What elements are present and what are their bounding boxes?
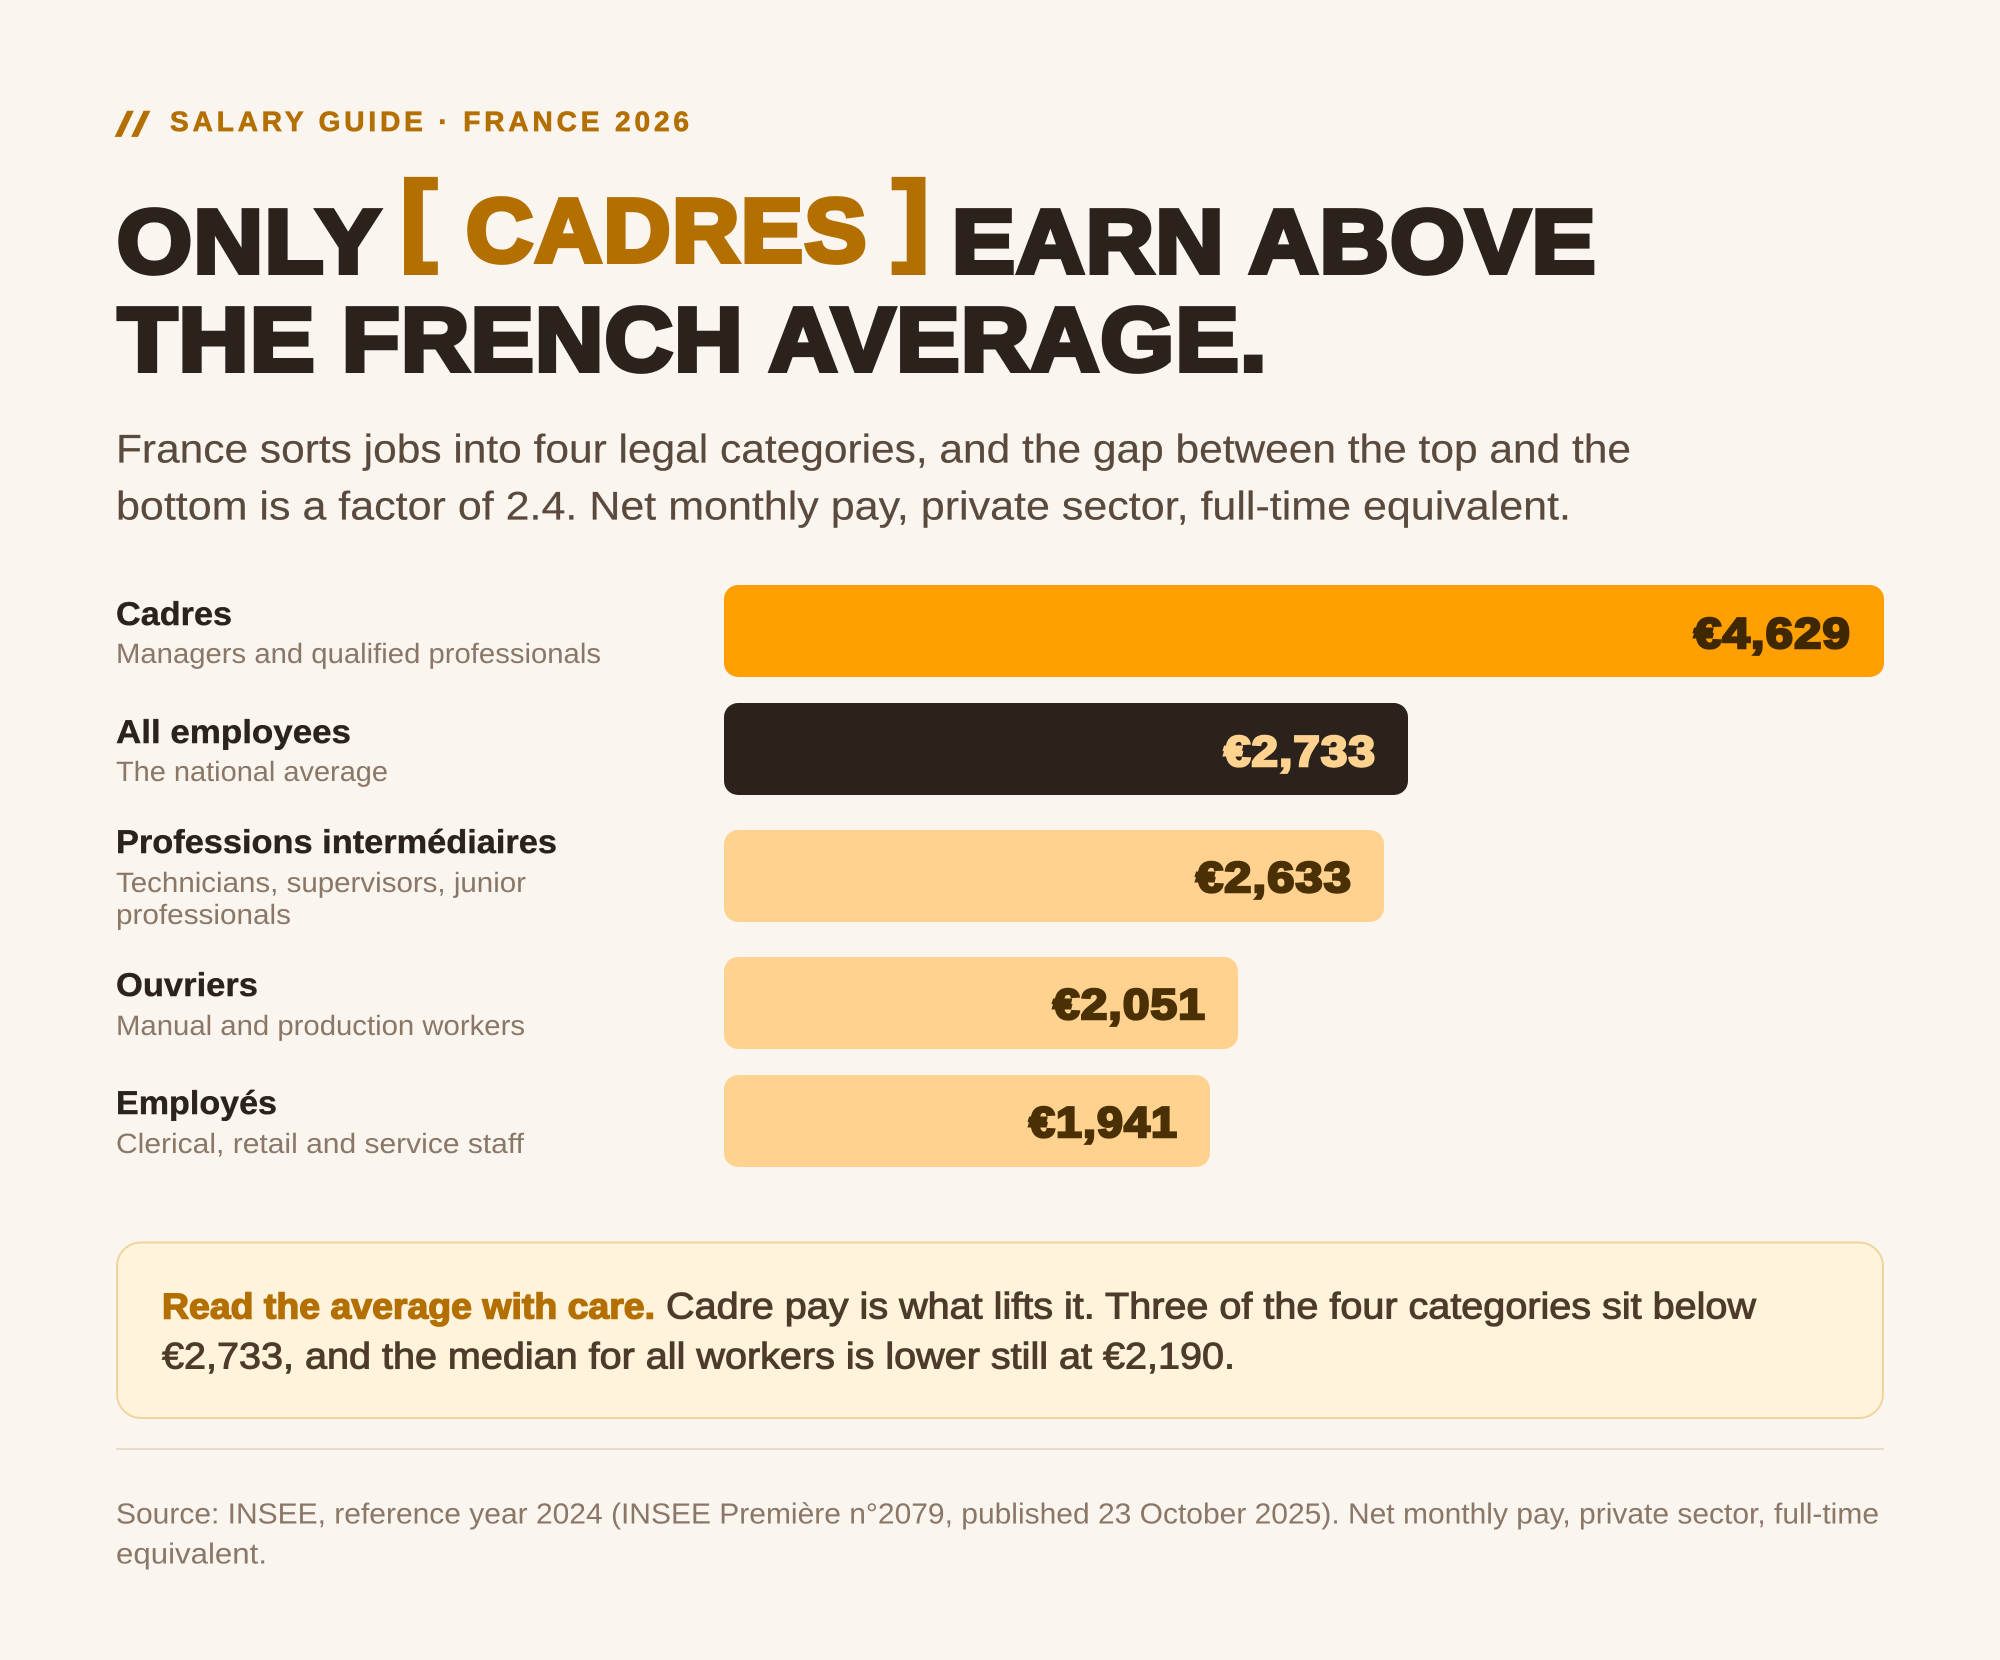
row: Ouvriers bbox=[116, 957, 1238, 1049]
row: Professions intermédiaires: €2,633 bbox=[1196, 854, 1352, 902]
callout: Read the average with care. bbox=[162, 1286, 655, 1326]
row: Professions intermédiaires: professionals bbox=[116, 899, 291, 930]
source note bbox=[116, 1498, 1879, 1570]
title: THE bbox=[118, 290, 316, 390]
bar chart: net monthly pay by category bbox=[116, 585, 1884, 1167]
title: ABOVE bbox=[1249, 192, 1597, 292]
eyebrow: SALARY GUIDE · FRANCE 2026 bbox=[170, 106, 689, 137]
row: Ouvriers: Manual and production workers bbox=[116, 1010, 525, 1041]
title bbox=[117, 162, 1597, 390]
row: Cadres: Managers and qualified professionals bbox=[116, 638, 601, 669]
row: Cadres: €4,629 bbox=[1694, 610, 1851, 658]
title: ONLY bbox=[117, 192, 382, 292]
title: EARN bbox=[952, 192, 1225, 292]
eyebrow: // bbox=[116, 106, 150, 144]
title: ] bbox=[892, 162, 930, 274]
row: Employés: Employés bbox=[116, 1084, 277, 1121]
callout: €2,733, and the median for all workers is lower still at €2,190. bbox=[162, 1336, 1235, 1376]
row: Professions intermédiaires: Professions intermédiaires bbox=[116, 823, 557, 860]
callout bbox=[117, 1242, 1883, 1418]
subtitle: bottom is a factor of 2.4. Net monthly pay, private sector, full-time equivalent. bbox=[116, 484, 1571, 528]
row: Professions intermédiaires bbox=[116, 823, 1384, 930]
row: Employés bbox=[116, 1075, 1210, 1167]
subtitle: France sorts jobs into four legal categories, and the gap between the top and the bbox=[116, 428, 1631, 472]
row: Ouvriers: €2,051 bbox=[1053, 981, 1206, 1029]
callout: Cadre pay is what lifts it. Three of the four categories sit below bbox=[666, 1286, 1756, 1326]
row: Professions intermédiaires: Technicians, supervisors, junior bbox=[116, 867, 526, 898]
row: All employees: The national average bbox=[116, 756, 388, 787]
subtitle bbox=[116, 428, 1631, 528]
row: All employees bbox=[116, 703, 1408, 795]
row: All employees: All employees bbox=[116, 713, 351, 750]
row: Employés: €1,941 bbox=[1029, 1099, 1178, 1147]
row: Cadres: Cadres bbox=[116, 595, 232, 632]
title: CADRES bbox=[466, 182, 868, 282]
row: All employees: €2,733 bbox=[1224, 728, 1376, 776]
title: FRENCH bbox=[342, 290, 744, 390]
title: AVERAGE. bbox=[769, 290, 1268, 390]
row: Ouvriers: Ouvriers bbox=[116, 966, 258, 1003]
source note: equivalent. bbox=[116, 1538, 267, 1570]
row: Cadres bbox=[116, 585, 1884, 677]
source note: Source: INSEE, reference year 2024 (INSEE Première n°2079, published 23 October 2025). Net monthly pay, private sector, full-time bbox=[116, 1498, 1879, 1530]
row: Employés: Clerical, retail and service staff bbox=[116, 1128, 524, 1159]
title: [ bbox=[400, 162, 437, 274]
